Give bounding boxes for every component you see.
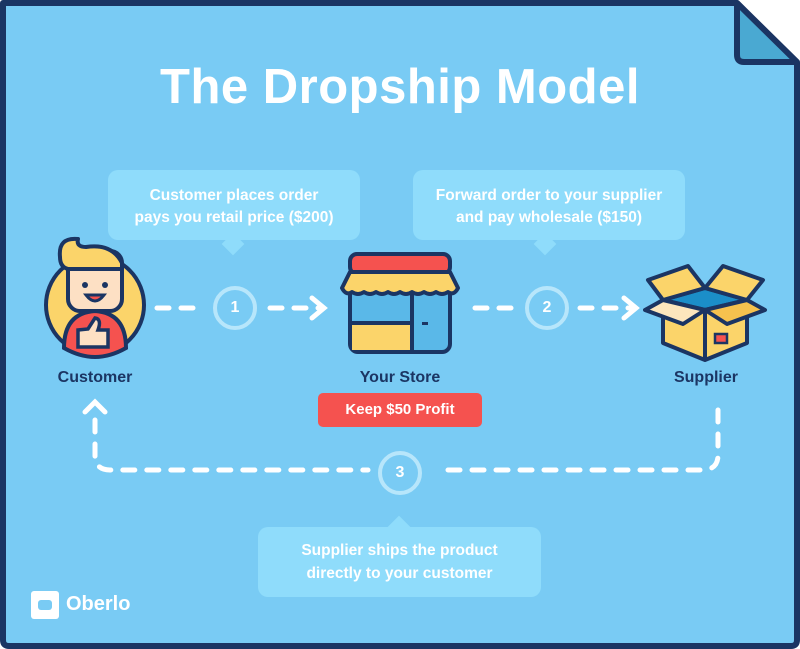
icon: store [340, 252, 460, 354]
label: supplier: Supplier [674, 369, 738, 386]
title: The Dropship Model [160, 60, 640, 114]
callout: step 1 [108, 170, 360, 240]
callout: step 1: Customer places order [150, 187, 318, 204]
text: 2 [543, 299, 551, 316]
label: customer: Customer [58, 369, 132, 386]
icon: box [643, 264, 768, 362]
flow dashes [85, 298, 718, 470]
callout: step 3 [258, 527, 541, 597]
callout: step 2: and pay wholesale ($150) [456, 209, 642, 226]
callout: step 1: pays you retail price ($200) [134, 209, 334, 226]
profit badge: Keep $50 Profit [345, 401, 455, 418]
icon: customer [44, 236, 146, 359]
callout: step 2: Forward order to your supplier [436, 187, 662, 204]
label: your store: Your Store [360, 369, 440, 386]
step numbers: 1 [231, 299, 239, 316]
logo: Oberlo [31, 591, 130, 619]
callout: step 3: Supplier ships the product [301, 542, 498, 559]
callout: step 2 [413, 170, 685, 240]
callout: step 3: directly to your customer [306, 565, 493, 582]
profit badge [318, 393, 482, 427]
text: 3 [396, 464, 404, 481]
logo: Oberlo: Oberlo [66, 593, 130, 615]
